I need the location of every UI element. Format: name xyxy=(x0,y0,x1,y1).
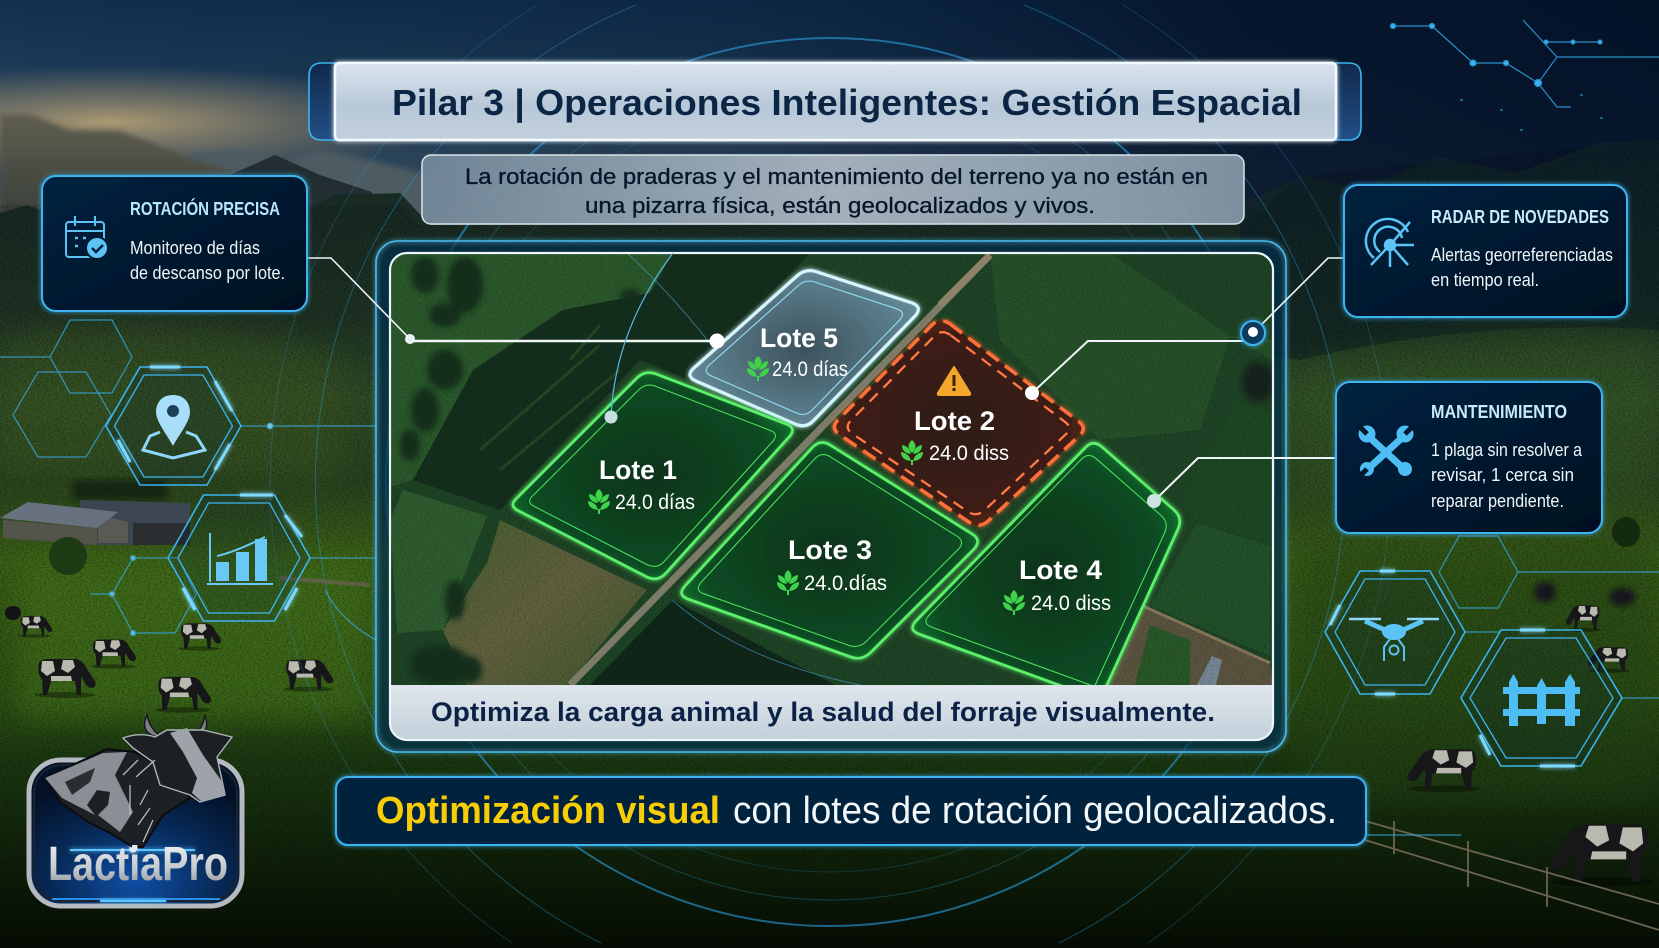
callout: rotación precisa: Monitoreo de días xyxy=(130,238,260,258)
zone: Lote 3 xyxy=(682,443,978,658)
icon: crossed tools xyxy=(1358,425,1414,476)
radar rings xyxy=(270,5,1390,943)
road xyxy=(570,255,990,685)
callout: mantenimiento: revisar, 1 cerca sin xyxy=(1431,465,1574,485)
icon: calendar xyxy=(66,216,108,259)
grazing cows xyxy=(5,517,1659,930)
logo: LactiaPro xyxy=(29,715,242,906)
panel: title xyxy=(309,63,1361,140)
icon: radar xyxy=(1366,219,1414,267)
callout: radar de novedades: RADAR DE NOVEDADES xyxy=(1431,207,1609,227)
callout: mantenimiento: 1 plaga sin resolver a xyxy=(1431,440,1583,460)
decorative thin hexagons and links xyxy=(0,320,1659,835)
zone: Lote 5 xyxy=(690,271,918,426)
lot labels xyxy=(588,323,1111,615)
aerial map of fields xyxy=(390,253,1274,700)
circuit network top right xyxy=(1390,20,1659,130)
logo: LactiaPro: LactiaPro xyxy=(48,838,228,891)
callout: mantenimiento: reparar pendiente. xyxy=(1431,491,1564,511)
lot labels: Lote 1 xyxy=(599,455,677,485)
callout: rotación precisa xyxy=(42,176,307,311)
panel: title: Pilar 3 | Operaciones Inteligentes: Gestión Espacial xyxy=(392,82,1302,124)
hexagon icon: bar chart xyxy=(168,495,310,621)
panel: subtitle xyxy=(422,155,1244,224)
callout: rotación precisa: de descanso por lote. xyxy=(130,263,285,283)
cow emblem xyxy=(45,715,232,847)
banner: bottom takeaway: Optimización visual xyxy=(376,790,720,832)
zone: Lote 2 xyxy=(834,321,1083,525)
icon: warning triangle xyxy=(938,367,970,395)
hexagon icon: drone xyxy=(1325,571,1465,694)
panel: subtitle: una pizarra física, están geolocalizados y vivos. xyxy=(585,193,1095,218)
panel: subtitle: La rotación de praderas y el mantenimiento del terreno ya no están en xyxy=(465,164,1208,189)
lot labels: Lote 5 xyxy=(760,323,838,353)
banner: bottom takeaway xyxy=(336,777,1366,845)
lot labels: 24.0.días xyxy=(804,572,887,595)
connector lines xyxy=(307,253,1343,508)
lot labels: 24.0 diss xyxy=(1031,592,1111,615)
zone: Lote 1 xyxy=(513,373,792,579)
lot labels: 24.0 diss xyxy=(929,442,1009,465)
hexagon icon: map pin xyxy=(106,367,241,485)
lot labels: 24.0 días xyxy=(615,491,695,514)
lot labels: Lote 4 xyxy=(1019,555,1102,585)
caption bar: Optimiza la carga animal y la salud del forraje visualmente. xyxy=(431,697,1215,727)
banner: bottom takeaway: con lotes de rotación geolocalizados. xyxy=(733,790,1337,832)
lot labels: 24.0 días xyxy=(772,358,848,381)
callout: radar de novedades: en tiempo real. xyxy=(1431,270,1539,290)
callout: radar de novedades xyxy=(1344,185,1627,317)
callout: rotación precisa: ROTACIÓN PRECISA xyxy=(130,198,280,219)
callout: radar de novedades: Alertas georreferenciadas xyxy=(1431,245,1613,265)
zone: Lote 4 xyxy=(913,443,1180,700)
callout: mantenimiento: MANTENIMIENTO xyxy=(1431,402,1567,422)
hexagon icon: fence xyxy=(1461,630,1622,766)
lot labels: Lote 3 xyxy=(788,535,872,565)
callout: mantenimiento xyxy=(1336,382,1602,533)
panel: map frame xyxy=(376,241,1286,752)
lot labels: Lote 2 xyxy=(914,406,995,436)
caption bar xyxy=(390,685,1273,740)
farm buildings xyxy=(0,480,370,585)
